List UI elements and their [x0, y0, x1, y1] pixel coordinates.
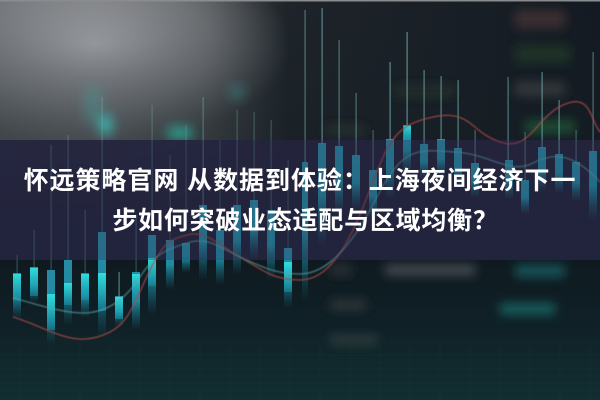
title band base: [0, 140, 600, 260]
candle bodies: [13, 125, 597, 345]
translucent title band: [0, 140, 600, 260]
teal trend line: [13, 151, 600, 313]
title: 步如何突破业态适配与区域均衡？: [112, 207, 499, 235]
candle wicks: [16, 8, 594, 298]
grid floor pattern: [0, 345, 600, 400]
title: 怀远策略官网 从数据到体验：上海夜间经济下一: [24, 167, 576, 195]
blurred teal glows: [85, 85, 244, 138]
red trend line: [13, 102, 600, 339]
bright candle segments: [13, 126, 411, 330]
title: [24, 167, 576, 235]
blurred table glows: [325, 10, 575, 345]
